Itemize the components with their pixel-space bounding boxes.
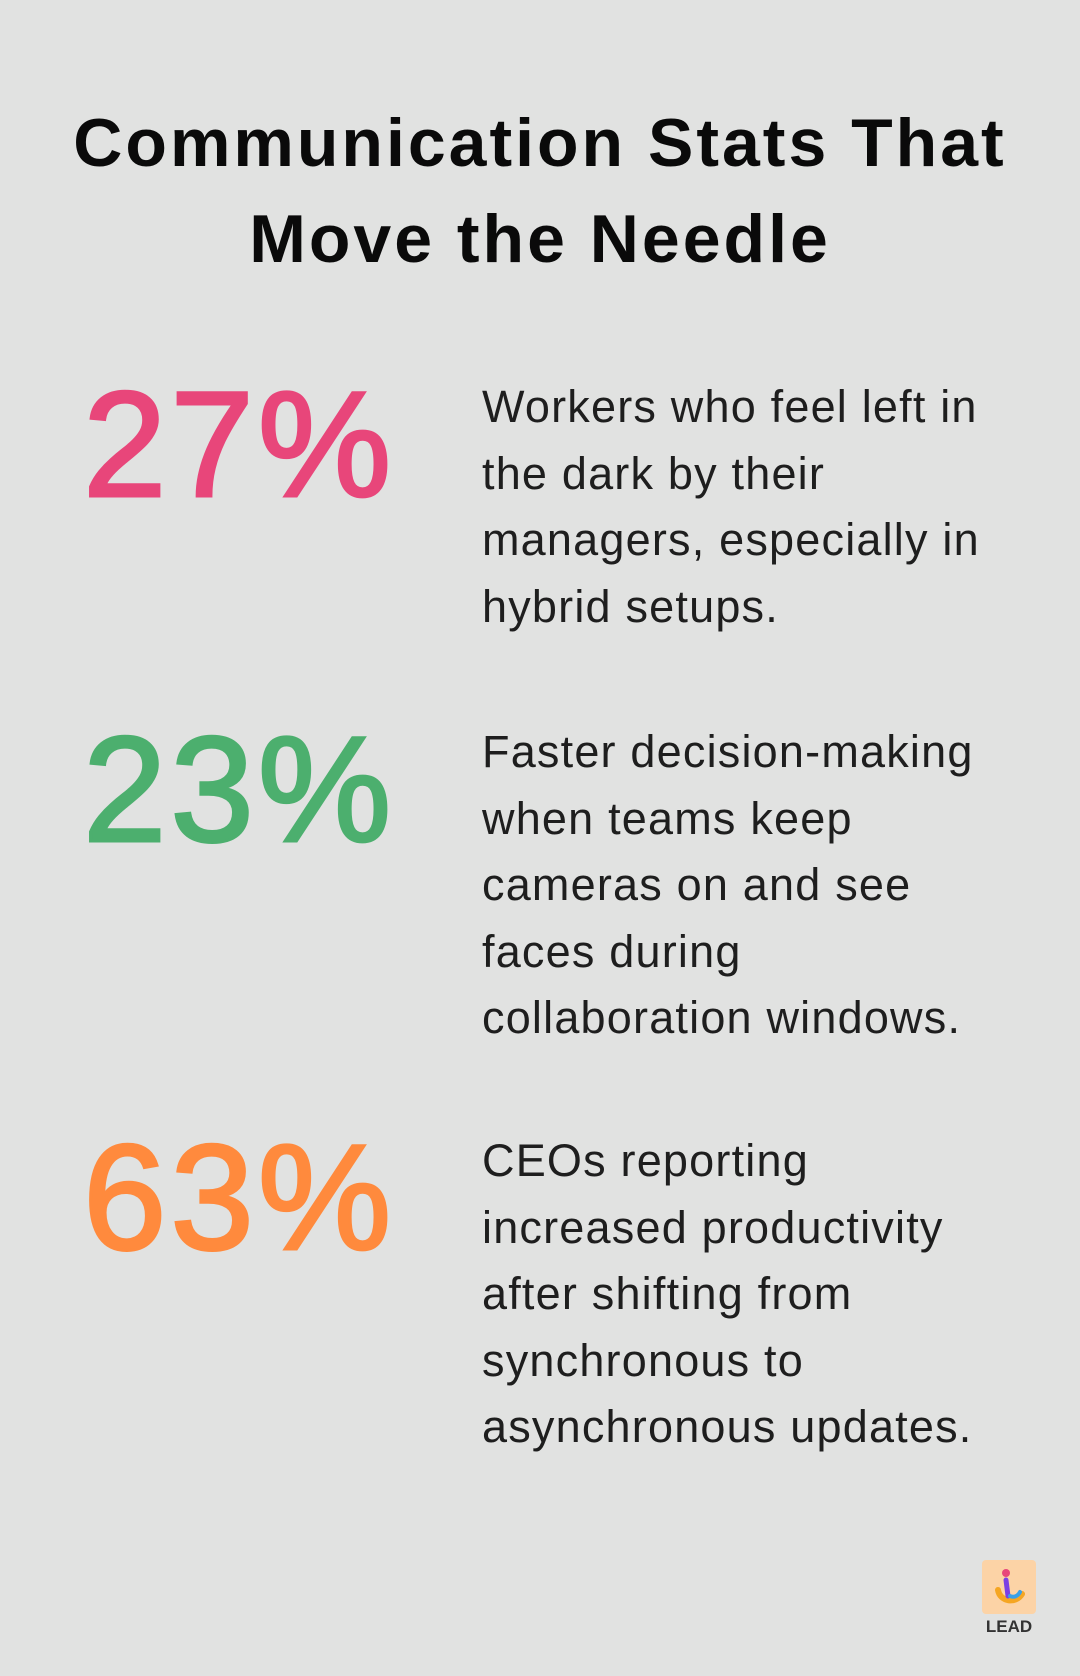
logo bbox=[982, 1560, 1036, 1636]
number: 23%: 23% bbox=[83, 705, 395, 873]
description 1: the dark by their bbox=[482, 448, 825, 498]
description 2: collaboration windows. bbox=[482, 992, 961, 1043]
description 3: CEOs reporting bbox=[482, 1135, 809, 1186]
title: Communication Stats That bbox=[73, 105, 1007, 181]
description 2: Faster decision-making bbox=[482, 726, 974, 777]
description 1: Workers who feel left in bbox=[482, 381, 978, 432]
number: 63%: 63% bbox=[83, 1113, 395, 1281]
description 3 bbox=[482, 1135, 973, 1452]
description 2 bbox=[482, 726, 974, 1043]
description 1: managers, especially in bbox=[482, 514, 980, 565]
stat 2 bbox=[83, 705, 974, 1043]
description 3: after shifting from bbox=[482, 1268, 852, 1319]
number: 27%: 27% bbox=[83, 360, 395, 528]
title bbox=[73, 105, 1007, 277]
stat 1 bbox=[83, 360, 980, 632]
description 3: synchronous to bbox=[482, 1334, 804, 1386]
description 3: asynchronous updates. bbox=[482, 1401, 973, 1452]
stat 3 bbox=[83, 1113, 973, 1452]
description 2: faces during bbox=[482, 926, 742, 976]
description 2: when teams keep bbox=[482, 792, 853, 844]
description 1: hybrid setups. bbox=[482, 580, 779, 632]
description 1 bbox=[482, 381, 980, 632]
description 3: increased productivity bbox=[482, 1202, 944, 1252]
logo text: LEAD bbox=[986, 1617, 1032, 1636]
title: Move the Needle bbox=[249, 201, 831, 277]
icon: logo mark bbox=[982, 1560, 1036, 1614]
description 2: cameras on and see bbox=[482, 859, 911, 910]
